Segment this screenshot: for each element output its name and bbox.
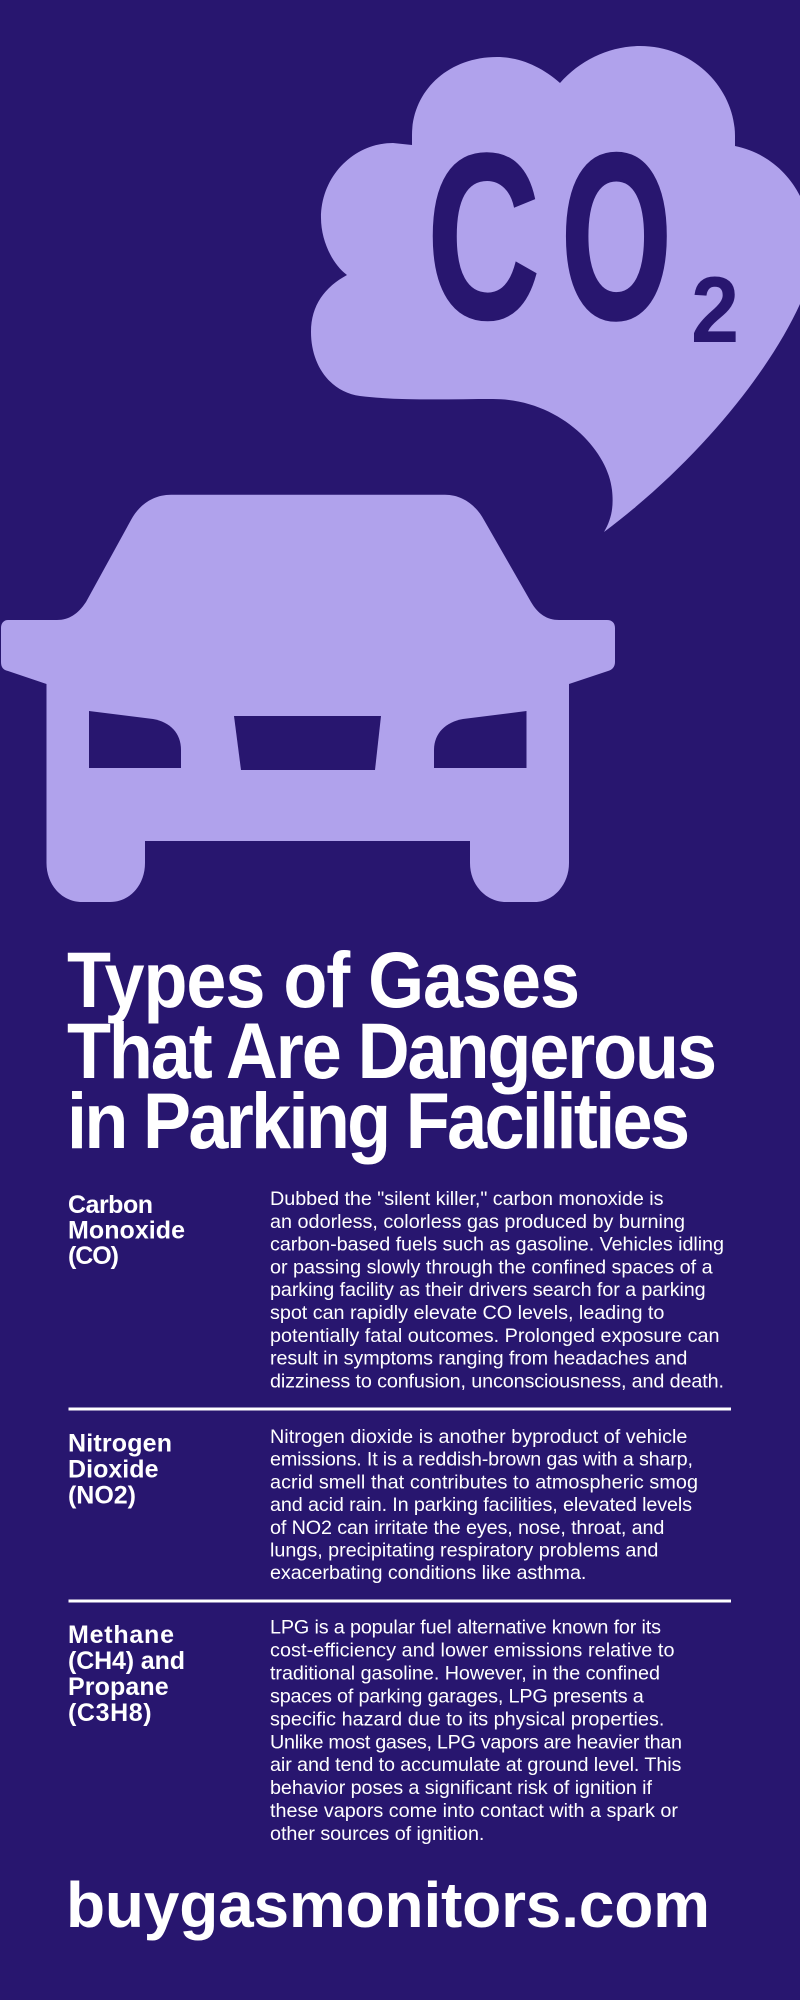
text: nitrogen dioxide description: emissions. It is a reddish-brown gas with a sharp, bbox=[270, 1449, 693, 1471]
heading: carbon monoxide: Monoxide bbox=[68, 1216, 185, 1244]
title: That Are Dangerous bbox=[67, 1007, 717, 1095]
heading: methane and propane bbox=[68, 1621, 185, 1727]
text: nitrogen dioxide description bbox=[270, 1426, 698, 1584]
text: methane and propane description: LPG is a popular fuel alternative known for its bbox=[270, 1616, 661, 1638]
text: methane and propane description: other sources of ignition. bbox=[270, 1823, 484, 1845]
icon: CO2 speech cloud bbox=[311, 46, 800, 532]
heading: nitrogen dioxide: (NO2) bbox=[68, 1481, 136, 1509]
text: carbon monoxide description: dizziness to confusion, unconsciousness, and death. bbox=[270, 1370, 724, 1392]
text: nitrogen dioxide description: exacerbating conditions like asthma. bbox=[270, 1562, 586, 1584]
text: carbon monoxide description: Dubbed the "silent killer," carbon monoxide is bbox=[270, 1188, 664, 1210]
text: methane and propane description: specific hazard due to its physical properties. bbox=[270, 1708, 664, 1730]
heading: methane and propane: (CH4) and bbox=[68, 1647, 185, 1675]
title: Types of Gases bbox=[67, 936, 580, 1024]
heading: nitrogen dioxide: Dioxide bbox=[68, 1456, 159, 1484]
icon: CO2 speech cloud: C bbox=[427, 106, 540, 369]
text: methane and propane description bbox=[270, 1616, 682, 1845]
footer website: buygasmonitors.com bbox=[66, 1869, 710, 1941]
text: nitrogen dioxide description: acrid smell that contributes to atmospheric smog bbox=[270, 1471, 698, 1493]
heading: carbon monoxide bbox=[68, 1191, 185, 1270]
text: carbon monoxide description: spot can rapidly elevate CO levels, leading to bbox=[270, 1302, 664, 1324]
heading: nitrogen dioxide bbox=[68, 1430, 172, 1509]
text: nitrogen dioxide description: Nitrogen dioxide is another byproduct of vehicle bbox=[270, 1426, 687, 1448]
text: carbon monoxide description: parking facility as their drivers search for a parking bbox=[270, 1279, 706, 1301]
heading: methane and propane: Methane bbox=[68, 1621, 174, 1649]
icon: CO2 speech cloud: 2 bbox=[691, 258, 739, 363]
text: carbon monoxide description: result in symptoms ranging from headaches and bbox=[270, 1348, 687, 1370]
text: methane and propane description: behavior poses a significant risk of ignition if bbox=[270, 1777, 652, 1799]
text: carbon monoxide description: carbon-based fuels such as gasoline. Vehicles idling bbox=[270, 1234, 724, 1256]
heading: methane and propane: (C3H8) bbox=[68, 1699, 152, 1727]
text: carbon monoxide description: or passing slowly through the confined spaces of a bbox=[270, 1256, 713, 1278]
text: methane and propane description: these vapors come into contact with a spark or bbox=[270, 1800, 678, 1822]
text: nitrogen dioxide description: of NO2 can irritate the eyes, nose, throat, and bbox=[270, 1517, 664, 1539]
text: methane and propane description: air and tend to accumulate at ground level. This bbox=[270, 1754, 682, 1776]
heading: methane and propane: Propane bbox=[68, 1673, 169, 1701]
grille bbox=[234, 716, 381, 770]
icon: CO2 speech cloud: O bbox=[561, 106, 672, 369]
text: methane and propane description: cost-efficiency and lower emissions relative to bbox=[270, 1639, 674, 1661]
icon: car front view bbox=[1, 495, 615, 902]
title: in Parking Facilities bbox=[67, 1077, 690, 1165]
text: carbon monoxide description bbox=[270, 1188, 724, 1392]
text: carbon monoxide description: potentially fatal outcomes. Prolonged exposure can bbox=[270, 1325, 720, 1347]
heading: carbon monoxide: Carbon bbox=[68, 1191, 153, 1219]
right headlight bbox=[434, 711, 526, 768]
text: methane and propane description: spaces of parking garages, LPG presents a bbox=[270, 1685, 644, 1707]
title bbox=[67, 936, 717, 1165]
text: nitrogen dioxide description: lungs, precipitating respiratory problems and bbox=[270, 1540, 658, 1562]
text: methane and propane description: Unlike most gases, LPG vapors are heavier than bbox=[270, 1731, 682, 1753]
text: carbon monoxide description: an odorless, colorless gas produced by burning bbox=[270, 1211, 685, 1233]
left headlight bbox=[89, 711, 181, 768]
text: methane and propane description: traditional gasoline. However, in the confined bbox=[270, 1662, 660, 1684]
heading: carbon monoxide: (CO) bbox=[68, 1242, 119, 1270]
heading: nitrogen dioxide: Nitrogen bbox=[68, 1430, 172, 1458]
text: nitrogen dioxide description: and acid rain. In parking facilities, elevated levels bbox=[270, 1494, 692, 1516]
